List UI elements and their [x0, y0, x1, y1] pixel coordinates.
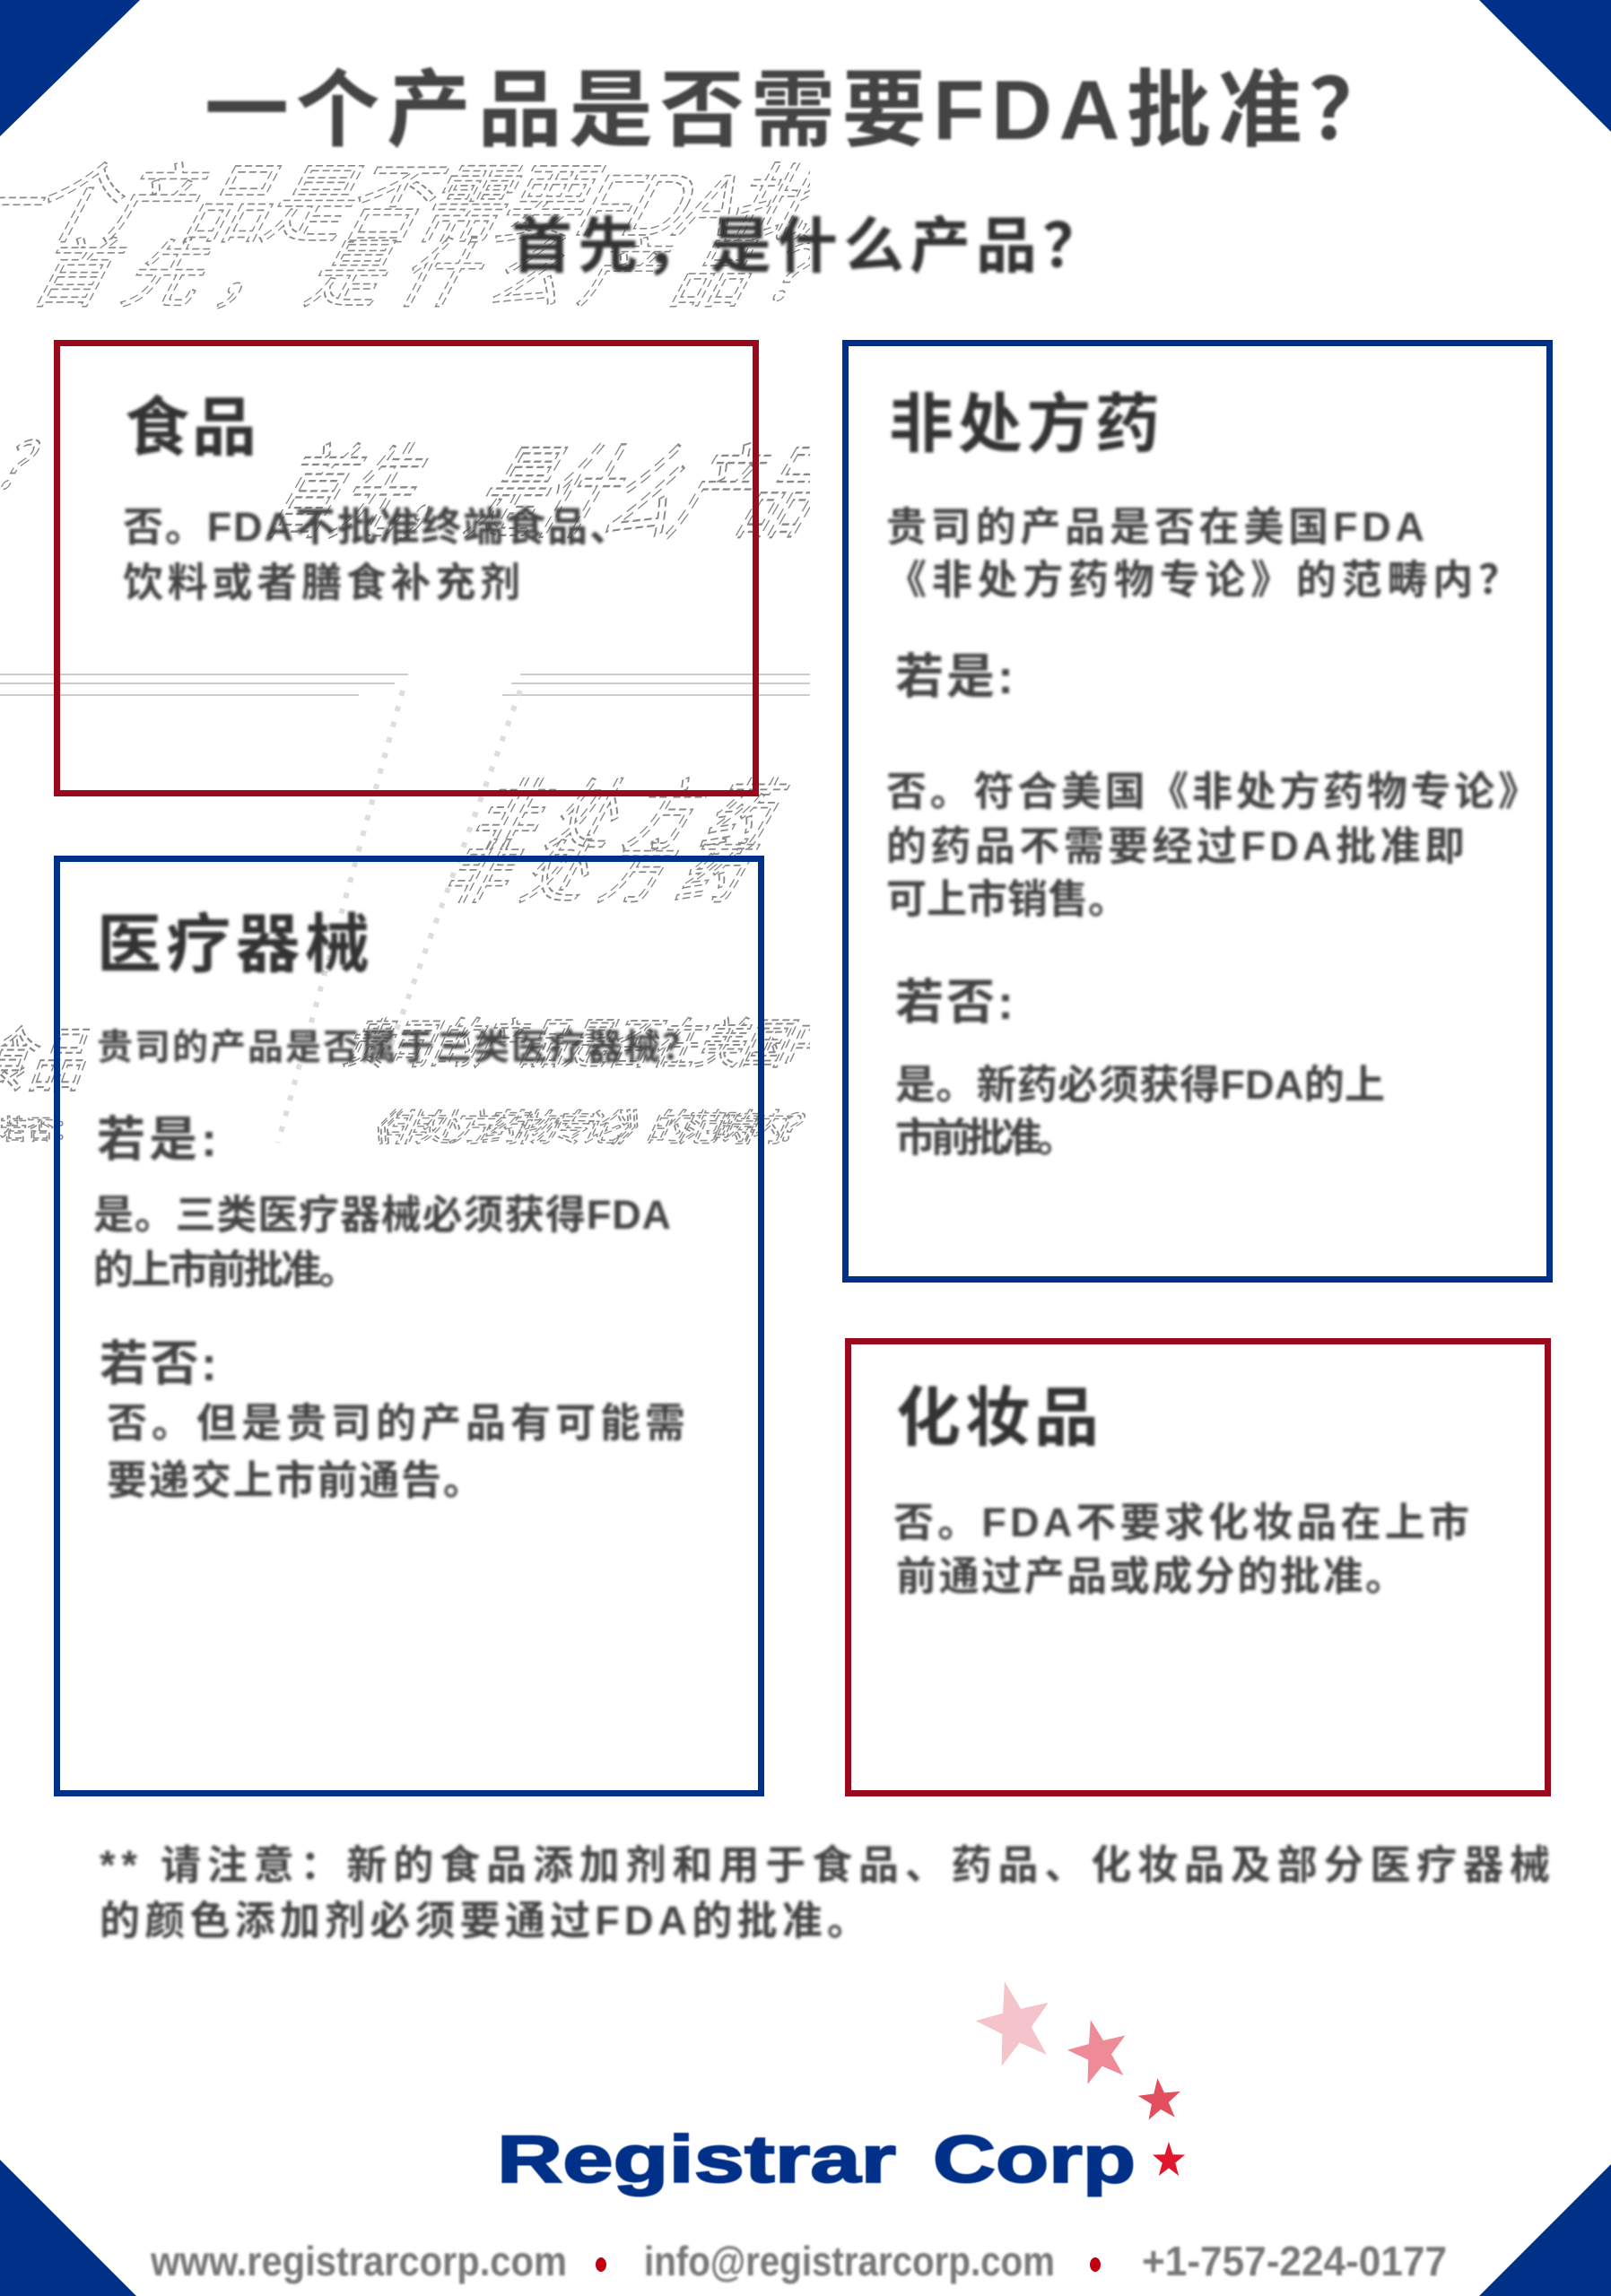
panel: cosmetics — [849, 1342, 1548, 1794]
food answer: 否。FDA不批准终端食品、 — [123, 504, 630, 550]
footnote: 的颜色添加剂必须要通过FDA的批准。 — [100, 1898, 867, 1944]
if no answer: 是。新药必须获得FDA的上 — [895, 1062, 1385, 1108]
heading: OTC drugs: 非处方药 — [889, 389, 1160, 461]
ghost artifact text layer: 非处方药 — [457, 774, 799, 860]
if yes answer: 可上市销售。 — [886, 876, 1128, 922]
ghost artifact text layer: 若否： — [0, 1116, 81, 1145]
logo: Registrar Corp — [497, 1972, 1185, 2196]
if yes answer: 的药品不需要经过FDA批准即 — [886, 823, 1465, 869]
heading: medical devices: 医疗器械 — [97, 909, 370, 981]
wordmark — [497, 2122, 1136, 2196]
cosmetics answer: 前通过产品或成分的批准。 — [896, 1553, 1406, 1599]
wordmark: Registrar — [497, 2122, 896, 2196]
OTC question — [886, 504, 1519, 605]
icon: stars — [968, 1972, 1185, 2176]
if yes answer — [886, 769, 1538, 922]
OTC question: 贵司的产品是否在美国FDA — [886, 504, 1424, 550]
ghost artifact text layer — [0, 158, 1001, 1149]
if no answer — [107, 1400, 685, 1503]
if no answer — [895, 1062, 1385, 1161]
if no answer: 要递交上市前通告。 — [107, 1457, 483, 1503]
if no answer: 市前批准。 — [895, 1115, 1077, 1161]
if yes label: 若是: — [895, 650, 1014, 704]
wordmark: Corp — [933, 2122, 1136, 2196]
if yes answer: 的上市前批准。 — [93, 1247, 359, 1292]
footnote: ** 请注意：新的食品添加剂和用于食品、药品、化妆品及部分医疗器械 — [100, 1842, 1550, 1888]
contact line: info@registrarcorp.com — [644, 2238, 1055, 2284]
panel: medical devices — [57, 859, 761, 1794]
panel: food — [57, 343, 755, 793]
ghost artifact text layer: 非处方药 — [431, 834, 769, 912]
food answer — [123, 504, 630, 605]
if yes label: 若是: — [97, 1113, 217, 1167]
heading: cosmetics: 化妆品 — [896, 1383, 1099, 1455]
ghost artifact text layer: 首先，是什么产品？ — [18, 233, 870, 317]
title: 一个产品是否需要FDA批准？ — [205, 42, 1393, 164]
device question: 贵司的产品是否属于三类医疗器械？ — [97, 1018, 698, 1070]
cosmetics answer — [893, 1500, 1469, 1599]
cosmetics answer: 否。FDA不要求化妆品在上市 — [893, 1500, 1469, 1545]
if yes answer: 否。符合美国《非处方药物专论》 — [886, 769, 1538, 814]
ghost artifact text layer: 首先，是什么产品？ — [248, 437, 923, 551]
subtitle: 首先，是什么产品？ — [511, 196, 1103, 285]
heading: food: 食品 — [125, 393, 257, 465]
OTC question: 《非处方药物专论》的范畴内？ — [886, 547, 1519, 605]
contact line: www.registrarcorp.com — [150, 2238, 567, 2284]
if no label: 若否: — [895, 976, 1014, 1030]
ghost artifact text layer: 《非处方药物专论》的范畴内？ — [346, 1108, 832, 1149]
if no answer: 否。但是贵司的产品有可能需 — [107, 1400, 685, 1446]
if yes answer — [93, 1192, 671, 1292]
contact line: +1-757-224-0177 — [1142, 2238, 1447, 2284]
food answer: 饮料或者膳食补充剂 — [123, 560, 520, 605]
panel: over-the-counter drugs — [845, 343, 1550, 1279]
contact line — [150, 2238, 1447, 2284]
ghost artifact text layer: 贵司的产品是否在美国FDA — [335, 1015, 893, 1074]
footnote — [100, 1842, 1550, 1944]
if yes answer: 是。三类医疗器械必须获得FDA — [93, 1192, 671, 1238]
if no label: 若否: — [100, 1337, 217, 1391]
